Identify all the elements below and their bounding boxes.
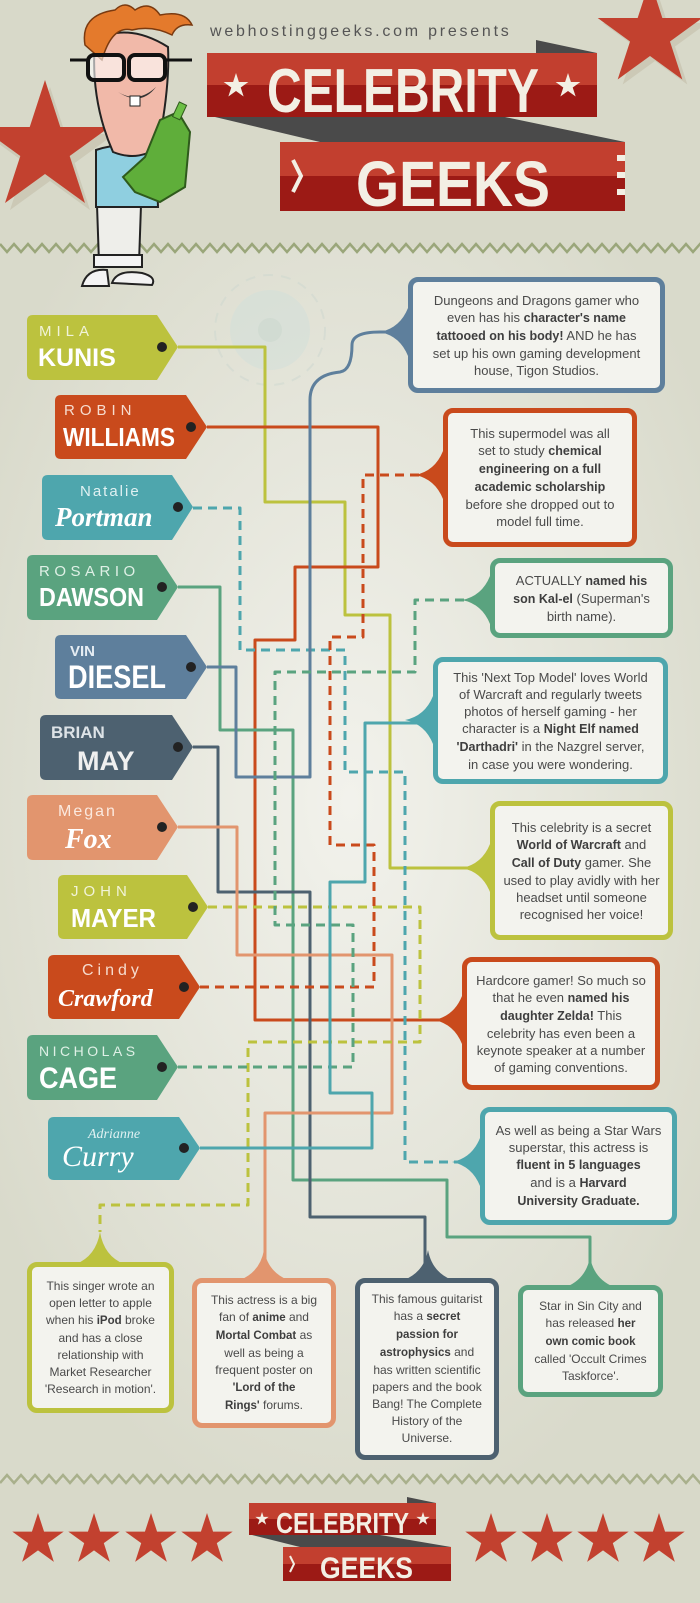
tag: Brian May	[40, 715, 193, 780]
footer stars	[12, 1513, 685, 1562]
callout: Mila Kunis fact	[490, 801, 673, 940]
tag: Rosario Dawson: ROSARIO	[39, 563, 140, 580]
zigzag borders	[0, 244, 700, 1483]
callout: Robin Williams fact: Hardcore gamer! So much so	[476, 972, 646, 988]
tag: Nicholas Cage: CAGE	[39, 1062, 117, 1095]
callout: Mila Kunis fact: World of Warcraft and	[517, 836, 646, 852]
callout: Adrianne Curry fact: in case you were wondering.	[468, 756, 633, 772]
callout: Adrianne Curry fact: This 'Next Top Model' loves World	[453, 670, 648, 684]
callout: Robin Williams fact: of gaming conventions.	[494, 1060, 628, 1074]
tag: Cindy Crawford	[48, 955, 200, 1019]
callout: Robin Williams fact: that he even named his	[492, 990, 629, 1004]
callout: Natalie Portman fact: and is a Harvard	[530, 1175, 627, 1190]
callout: Brian May fact: has written scientific	[373, 1363, 481, 1377]
connector lines	[100, 332, 590, 1285]
callout: Natalie Portman fact: fluent in 5 languages	[516, 1158, 641, 1172]
callout: Cindy Crawford fact: academic scholarship	[475, 480, 605, 494]
callout: John Mayer fact: open letter to apple	[49, 1296, 152, 1310]
title ribbon: CELEBRITY GEEKS: GEEKS	[356, 148, 550, 220]
callout: Brian May fact: Bang! The Complete	[372, 1397, 482, 1411]
callout: Vin Diesel fact	[408, 277, 665, 393]
callout: Mila Kunis fact: This celebrity is a secret	[512, 820, 651, 834]
callout: Cindy Crawford fact: This supermodel was all	[470, 426, 610, 441]
callout: Rosario Dawson fact: own comic book	[545, 1336, 636, 1348]
callout: Megan Fox fact: 'Lord of the	[233, 1382, 295, 1394]
tag: Megan Fox: Megan	[58, 803, 117, 820]
callout: Rosario Dawson fact: has released her	[546, 1316, 635, 1330]
callout: Cindy Crawford fact: engineering on a full	[479, 462, 601, 476]
callout: Brian May fact: passion for	[396, 1329, 458, 1341]
tag: Adrianne Curry	[48, 1117, 200, 1180]
tag: Mila Kunis: MILA	[39, 323, 94, 340]
callout: John Mayer fact: 'Research in motion'.	[45, 1382, 156, 1396]
tag: Natalie Portman: Portman	[54, 502, 153, 532]
tag: Brian May: BRIAN	[51, 723, 105, 742]
tag: Nicholas Cage	[27, 1035, 178, 1100]
tag: Rosario Dawson: DAWSON	[39, 582, 144, 612]
callout: Adrianne Curry fact: of Warcraft and regularly tweets	[459, 686, 642, 702]
tag: Vin Diesel: DIESEL	[68, 659, 166, 695]
callout: Brian May fact: papers and the book	[372, 1380, 482, 1394]
callout: Brian May fact: has a secret	[394, 1309, 460, 1323]
callout: Mila Kunis fact: used to play avidly with her	[503, 872, 660, 888]
icon: big stars header	[0, 0, 700, 210]
callout: Cindy Crawford fact: set to study chemical	[478, 443, 602, 458]
callout: Adrianne Curry fact: photos of herself gaming - her	[464, 704, 637, 718]
callout: Natalie Portman fact: superstar, this actress is	[509, 1140, 648, 1155]
tag: Rosario Dawson	[27, 555, 178, 620]
callout: Adrianne Curry fact: 'Darthadri' in the Nazgrel server,	[456, 738, 644, 754]
callout: Mila Kunis fact: headset until someone	[516, 890, 647, 904]
callout: Cindy Crawford fact: before she dropped out to	[466, 497, 614, 512]
callout: Rosario Dawson fact: Taskforce'.	[562, 1368, 619, 1382]
tag: John Mayer: JOHN	[71, 883, 132, 900]
tag: Mila Kunis: KUNIS	[38, 344, 116, 372]
tag: Megan Fox: Fox	[64, 824, 112, 855]
callout: Brian May fact: History of the	[392, 1414, 462, 1428]
tag: Nicholas Cage: NICHOLAS	[39, 1043, 139, 1059]
decoration: target circles	[215, 275, 325, 385]
callout: Vin Diesel fact: tattooed on his body! AND he has	[436, 328, 637, 342]
callout: Vin Diesel fact: set up his own gaming development	[433, 346, 640, 360]
tag: John Mayer	[58, 875, 208, 939]
callout: Megan Fox fact: well as being a	[224, 1346, 304, 1360]
title: webhostinggeeks presents: webhostinggeeks.com presents	[209, 23, 512, 40]
callout: Natalie Portman fact: University Graduate.	[517, 1194, 640, 1208]
callout: Robin Williams fact: daughter Zelda! This	[500, 1008, 622, 1022]
callout: John Mayer fact	[27, 1262, 174, 1413]
callout: Megan Fox fact: This actress is a big	[211, 1292, 317, 1306]
tag: Adrianne Curry: Curry	[62, 1140, 134, 1173]
callout: Vin Diesel fact: even has his character's name	[447, 310, 626, 324]
tag: John Mayer: MAYER	[71, 903, 156, 933]
callout: Megan Fox fact: fan of anime and	[219, 1310, 309, 1324]
tag: Natalie Portman: Natalie	[80, 483, 141, 500]
callout: John Mayer fact: and has a close	[58, 1330, 143, 1344]
callout: Robin Williams fact: keynote speaker at a number	[477, 1042, 645, 1058]
callout: Brian May fact: astrophysics and	[380, 1345, 474, 1359]
callout: Cindy Crawford fact	[443, 408, 637, 547]
callout: Rosario Dawson fact: Star in Sin City and	[539, 1298, 642, 1312]
callout: John Mayer fact: when his iPod broke	[46, 1312, 155, 1326]
tag: Megan Fox	[27, 795, 178, 860]
callout: John Mayer fact: Market Researcher	[49, 1364, 152, 1378]
callout: Megan Fox fact: Rings' forums.	[225, 1398, 303, 1412]
callout: Brian May fact: This famous guitarist	[372, 1292, 482, 1306]
callout: Vin Diesel fact: house, Tigon Studios.	[474, 362, 599, 378]
callout: Rosario Dawson fact	[518, 1285, 663, 1397]
tag: Vin Diesel: VIN	[70, 643, 95, 660]
tag: Robin Williams: WILLIAMS	[63, 422, 175, 452]
tag: Cindy Crawford: Crawford	[58, 986, 154, 1012]
callout: Natalie Portman fact: As well as being a Star Wars	[496, 1123, 661, 1138]
callout: Robin Williams fact: celebrity has even been a	[487, 1026, 635, 1040]
tag: Cindy Crawford: Cindy	[82, 962, 143, 979]
callout: Nicholas Cage fact	[490, 558, 673, 638]
callout: Nicholas Cage fact: birth name).	[547, 608, 616, 624]
tag: Mila Kunis	[27, 315, 178, 380]
callout: Adrianne Curry fact: character is a Night Elf named	[462, 720, 639, 736]
callout: Cindy Crawford fact: model full time.	[496, 514, 584, 529]
callout: John Mayer fact: This singer wrote an	[46, 1278, 155, 1292]
tag: Adrianne Curry: Adrianne	[87, 1127, 140, 1142]
callout: Nicholas Cage fact: ACTUALLY named his	[516, 572, 647, 588]
callout: Mila Kunis fact: Call of Duty gamer. She	[512, 854, 651, 870]
icon: nerd character	[70, 5, 192, 286]
tag: Robin Williams	[55, 395, 207, 459]
callout: Megan Fox fact	[192, 1278, 336, 1428]
callout: Brian May fact	[355, 1278, 499, 1460]
footer ribbon	[249, 1497, 451, 1585]
footer ribbon: GEEKS	[320, 1552, 413, 1585]
callout: Brian May fact: Universe.	[402, 1431, 452, 1445]
callout: Megan Fox fact: frequent poster on	[215, 1362, 313, 1376]
callout pointers	[76, 308, 614, 1287]
title ribbon: CELEBRITY GEEKS: CELEBRITY	[267, 57, 539, 126]
tag: Natalie Portman	[42, 475, 193, 540]
callout: Mila Kunis fact: recognised her voice!	[520, 906, 643, 922]
callout: Robin Williams fact	[462, 957, 660, 1090]
callout: Megan Fox fact: Mortal Combat as	[216, 1328, 312, 1342]
callout: John Mayer fact: relationship with	[57, 1348, 144, 1362]
callout: Adrianne Curry fact	[433, 657, 668, 784]
title ribbon: CELEBRITY GEEKS	[207, 40, 625, 220]
callout: Vin Diesel fact: Dungeons and Dragons gamer who	[434, 292, 639, 308]
tag: Robin Williams: ROBIN	[64, 402, 137, 419]
tag: Vin Diesel	[55, 635, 207, 699]
tag: Brian May: MAY	[77, 746, 135, 776]
callout: Rosario Dawson fact: called 'Occult Crimes	[534, 1352, 647, 1366]
footer ribbon: CELEBRITY	[276, 1508, 409, 1540]
callout: Nicholas Cage fact: son Kal-el (Superman's	[513, 590, 650, 606]
callout: Natalie Portman fact	[480, 1107, 677, 1225]
